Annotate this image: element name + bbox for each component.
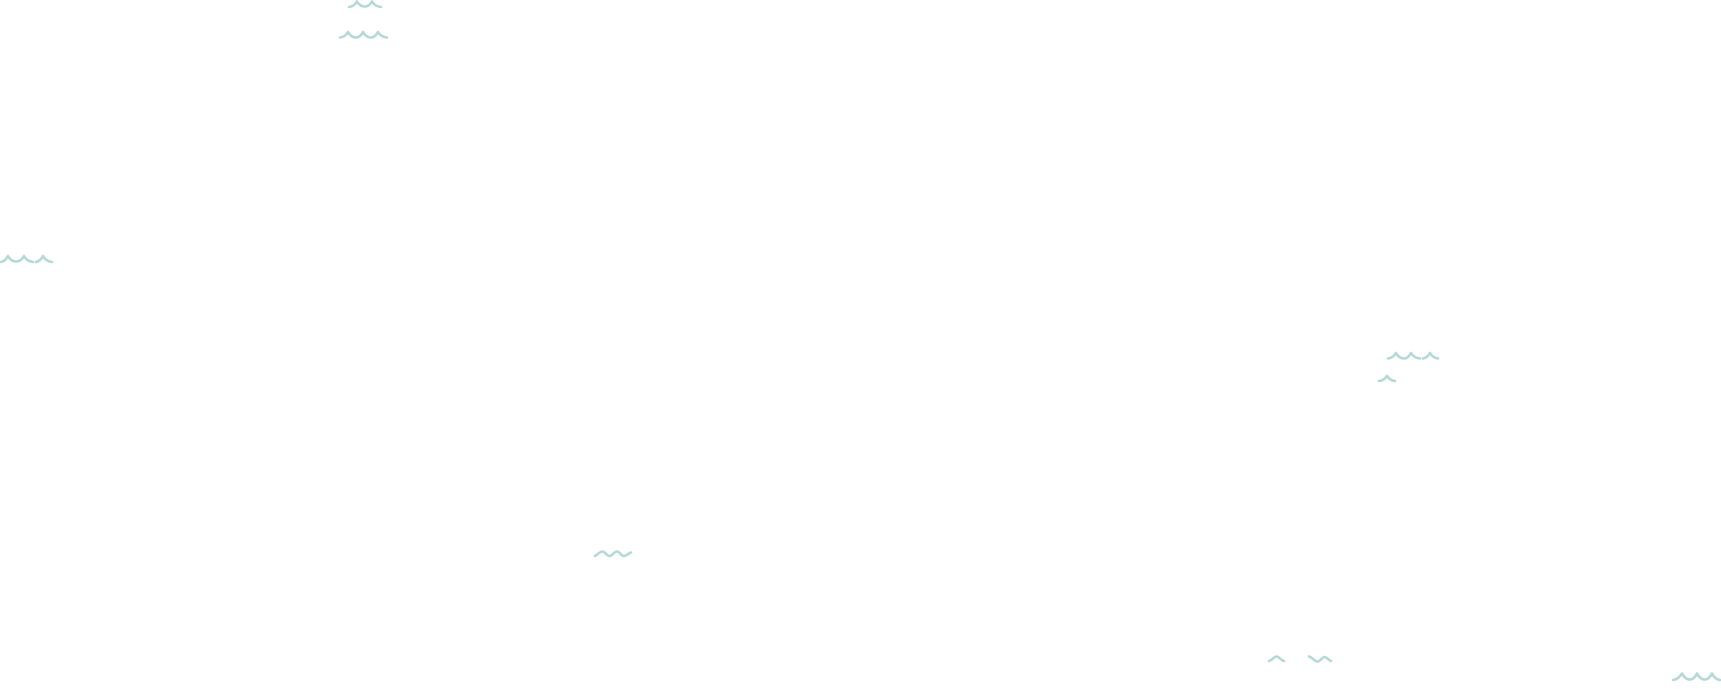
icon: wave right side, single crest: [1423, 353, 1438, 358]
icon: sine wave lower centre: [595, 552, 631, 556]
icon: wave left edge, two crests: [1, 256, 33, 262]
icon: small wave right side, one crest: [1379, 376, 1395, 381]
icon: small wave bottom right, one crest: [1269, 656, 1284, 661]
icon: wave below it, three crests: [340, 32, 387, 38]
icon: wave right side, two crests: [1388, 353, 1420, 358]
icon: wave top centre-left, two crests: [349, 2, 381, 7]
icon: sine wave bottom right: [1309, 656, 1331, 662]
icon: wave bottom right corner, three crests: [1673, 674, 1720, 680]
icon: wave left edge, single crest: [36, 256, 52, 262]
